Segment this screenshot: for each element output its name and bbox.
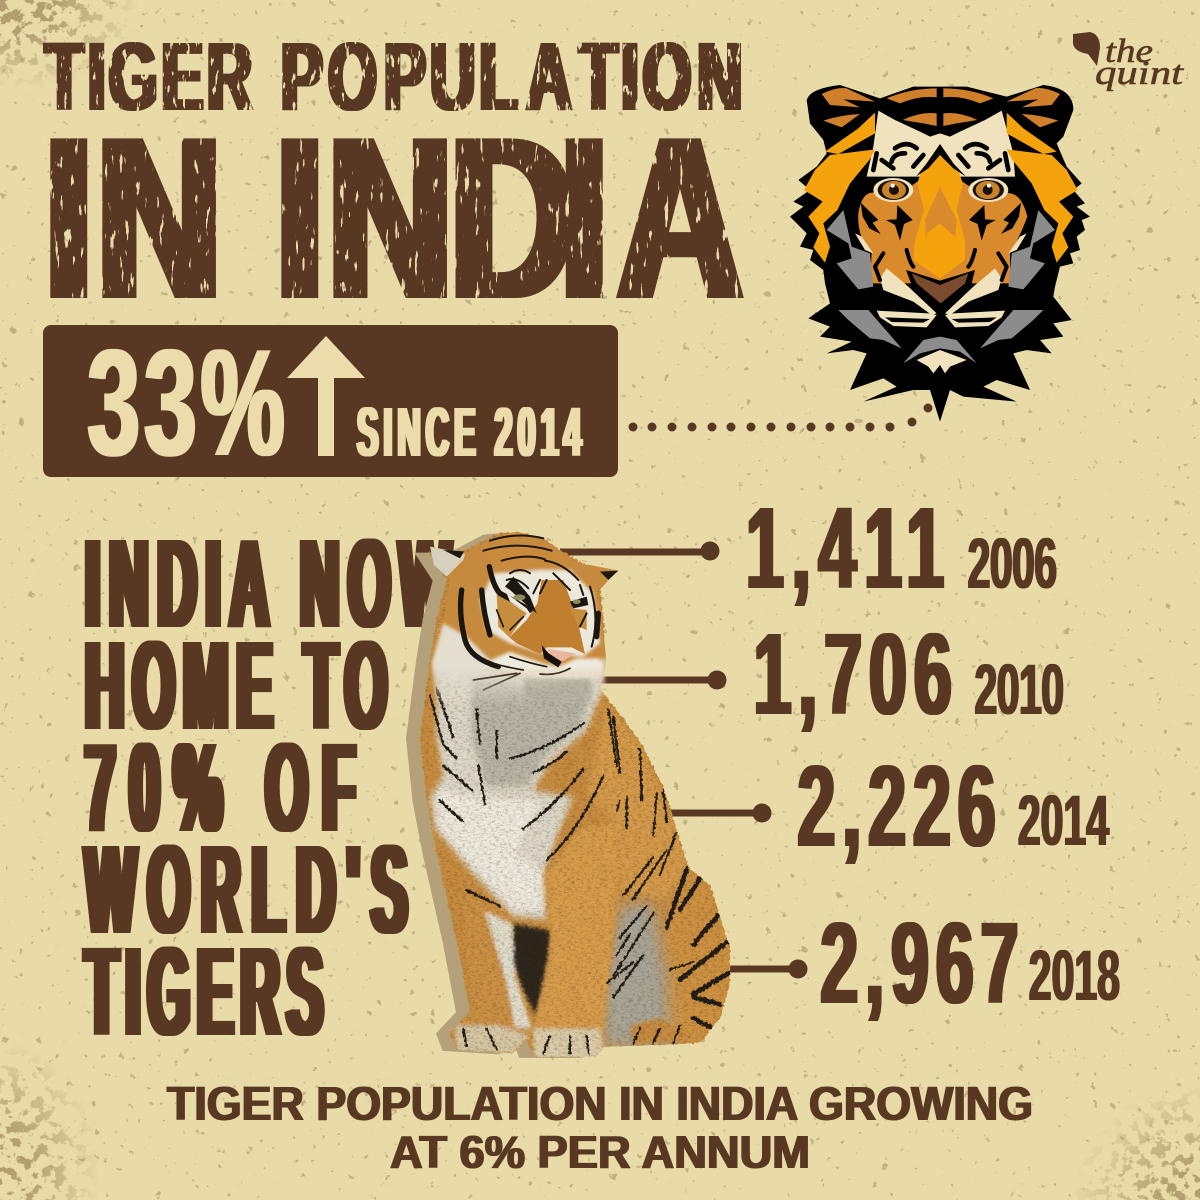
stat: 2,967 in 2018: 2,967 (820, 899, 1018, 1029)
stat: 2,226 in 2014 (798, 742, 1109, 872)
stat: 2,967 in 2018 (820, 899, 1120, 1029)
year 2014: 2014 (1018, 783, 1109, 861)
stat: 1,411 in 2006 (746, 484, 1057, 614)
logo: the quint (1073, 32, 1185, 92)
footer caption: TIGER POPULATION IN INDIA GROWING (167, 1078, 1033, 1131)
text block: India now home to 70% of world's tigers: TIGERS (85, 921, 323, 1062)
nose (547, 649, 576, 664)
title line: IN INDIA: IN INDIA (45, 89, 742, 348)
stat value 33%: 33% (87, 318, 285, 487)
tiger body (400, 520, 733, 1060)
logo: the quint: quint (1095, 55, 1185, 92)
head base and ears (430, 532, 618, 710)
icon: speech bubble (1073, 32, 1100, 66)
head stripes (461, 535, 598, 690)
eyes (505, 577, 537, 613)
stat box: 33% up since 2014 (43, 318, 618, 487)
tiger head (430, 532, 618, 710)
year 2006: 2006 (968, 526, 1057, 604)
icon: stylised tiger face (790, 85, 1090, 422)
icon: up arrow (287, 336, 365, 456)
stat: 1,706 in 2010 (754, 610, 1064, 740)
stat: 1,411 in 2006: 1,411 (746, 484, 944, 614)
tiger drop shadow (406, 534, 716, 1058)
orange muzzle and cheeks (509, 580, 585, 654)
dotted connector (628, 404, 932, 432)
text block: India now home to 70% of world's tigers: INDIA NOW (85, 513, 451, 654)
footer caption: AT 6% PER ANNUM (390, 1126, 810, 1178)
hind flank (603, 902, 670, 1046)
text block: India now home to 70% of world's tigers: HOME TO (85, 615, 387, 756)
footer caption (167, 1078, 1033, 1178)
text block: India now home to 70% of world's tigers (85, 513, 451, 1062)
white head patches (430, 567, 608, 704)
stat: 1,706 in 2010: 1,706 (754, 610, 952, 740)
logo: the quint: the (1105, 33, 1153, 70)
since 2014 label: SINCE 2014 (357, 393, 581, 471)
text block: India now home to 70% of world's tigers: 70% OF (85, 717, 355, 858)
year 2018: 2018 (1029, 938, 1120, 1016)
photo: sitting tiger (400, 520, 733, 1060)
stat: 2,226 in 2014: 2,226 (798, 742, 996, 872)
timeline connector lines (560, 542, 808, 978)
year 2010: 2010 (975, 652, 1064, 730)
text block: India now home to 70% of world's tigers: WORLD'S (85, 819, 407, 960)
title line: TIGER POPULATION: TIGER POPULATION (45, 23, 742, 131)
